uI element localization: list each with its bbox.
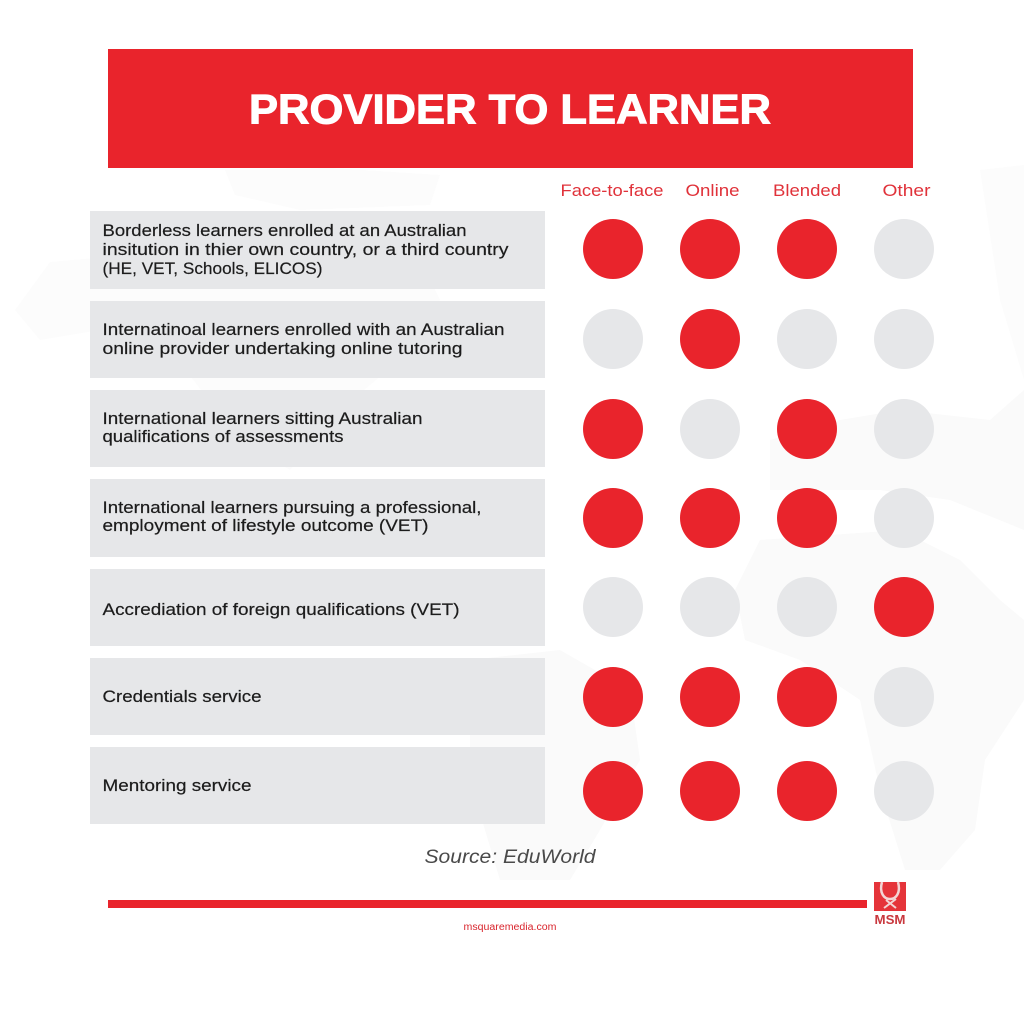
row 7 label: Mentoring service [102,776,252,795]
row 5 label: Accrediation of foreign qualifications (VET) [102,600,460,619]
row 6 label [90,658,545,735]
row 1 label [90,211,545,289]
source note: Source: EduWorld [424,847,597,868]
row 5 label [90,569,545,646]
row 3 label [90,390,545,467]
row 3 label: International learners sitting Australian [102,409,423,428]
footer rule [108,900,867,908]
row 6 label: Credentials service [102,687,262,706]
row 2 label [90,301,545,378]
row 1 label: insitution in thier own country, or a third country [102,240,509,259]
row 4 dots [583,488,934,548]
row 7 label [90,747,545,824]
row 4 label: International learners pursuing a professional, [102,498,482,517]
column headers: Other [882,181,931,200]
row 2 dots [583,309,934,369]
background: faint world map [15,165,1024,880]
column headers: Online [686,181,740,200]
row 1 dots [583,219,934,279]
row 4 label [90,479,545,557]
title: PROVIDER TO LEARNER [249,86,771,132]
title banner [108,49,913,168]
row 2 label: online provider undertaking online tutoring [102,339,462,358]
column headers [560,181,931,200]
row 6 dots [583,667,934,727]
logo wordmark: MSM [874,913,906,927]
row 3 label: qualifications of assessments [102,427,344,446]
row 1 label: (HE, VET, Schools, ELICOS) [102,259,322,278]
row 1 label: Borderless learners enrolled at an Australian [102,221,466,240]
column headers: Blended [773,181,841,200]
row 4 label: employment of lifestyle outcome (VET) [102,516,428,535]
column headers: Face-to-face [560,181,664,200]
website url: msquaremedia.com [464,922,556,933]
row 3 dots [583,399,934,459]
row 2 label: Internatinoal learners enrolled with an Australian [102,320,504,339]
row 5 dots [583,577,934,637]
icon: MSM logo [874,882,906,927]
row 7 dots [583,761,934,821]
